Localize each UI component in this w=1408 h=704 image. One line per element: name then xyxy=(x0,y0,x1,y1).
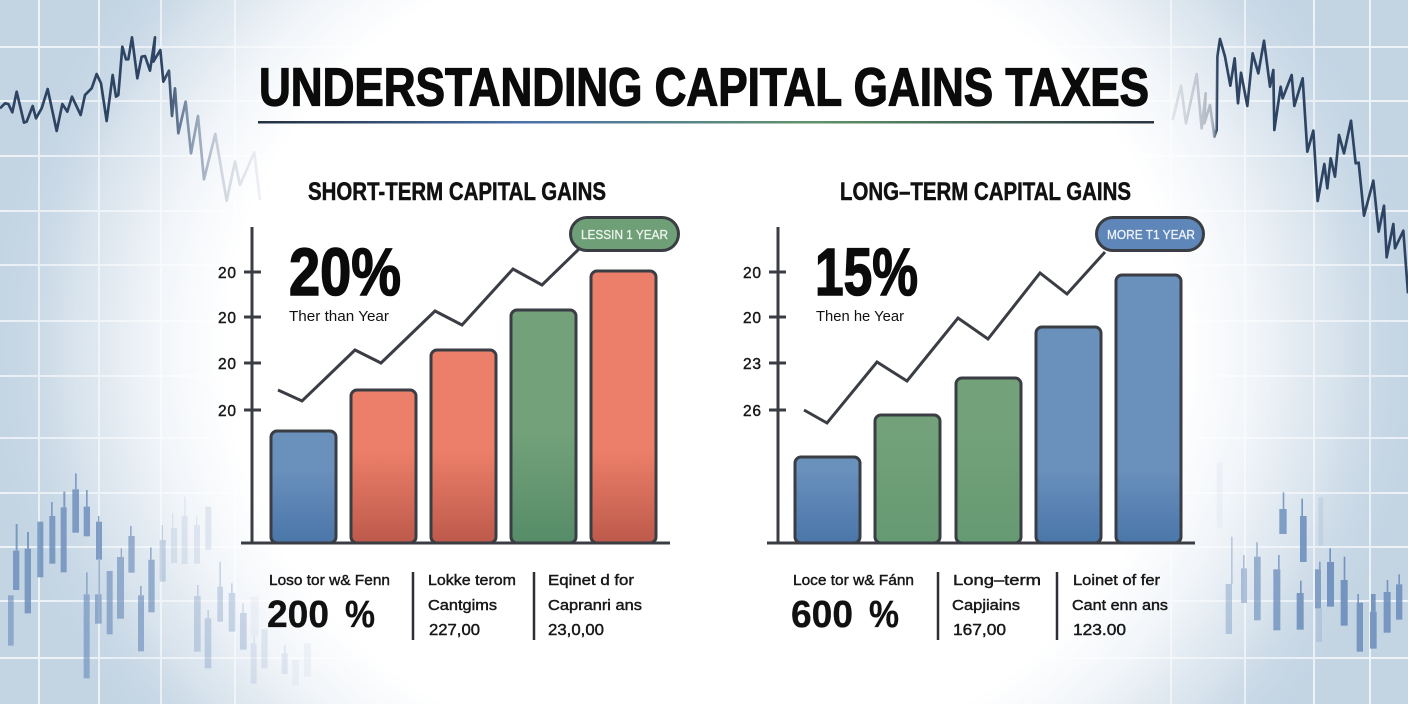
heading: short-term: SHORT-TERM CAPITAL GAINS xyxy=(308,178,606,206)
stat: rate: 600 xyxy=(791,594,853,636)
title: UNDERSTANDING CAPITAL GAINS TAXES xyxy=(259,58,1149,118)
stat: long-term amount xyxy=(413,572,516,640)
rate caption: Then he Year xyxy=(816,308,904,325)
stat: earned amount: 23,0,00 xyxy=(548,622,604,639)
heading: long-term: LONG–TERM CAPITAL GAINS xyxy=(840,178,1131,206)
badge: more than 1 year: MORE T1 YEAR xyxy=(1107,227,1195,242)
right candlestick chart xyxy=(1217,463,1402,652)
stat: long-term amount: Long–term xyxy=(953,572,1041,589)
rate: 15%: 15% xyxy=(815,235,918,310)
stat: long-term amount: 167,00 xyxy=(953,622,1006,639)
stat: long-term amount: 227,00 xyxy=(429,622,480,639)
badge: less than 1 year: LESSIN 1 YEAR xyxy=(581,227,668,242)
panel: long-term capital gains xyxy=(743,178,1204,640)
stat: long-term amount: Cantgims xyxy=(428,597,497,614)
rate caption: Ther than Year xyxy=(289,308,389,325)
stat: earned amount: Cant enn ans xyxy=(1072,597,1168,614)
stat: rate xyxy=(267,572,390,636)
bar chart: long-term xyxy=(767,227,1195,543)
panel: short-term capital gains xyxy=(218,178,678,640)
axis labels: short-term xyxy=(218,265,236,420)
stat: earned amount: Loinet of fer xyxy=(1073,572,1160,589)
stat: earned amount xyxy=(1057,572,1168,640)
right stock line chart xyxy=(1173,39,1408,293)
stat: long-term amount xyxy=(938,572,1041,640)
left candlestick chart xyxy=(8,473,311,685)
trend line: short-term xyxy=(278,248,580,401)
stat: rate: Loso tor w& Fenn xyxy=(269,572,390,589)
axis labels: short-term: 20 xyxy=(218,356,236,373)
stat: rate: % xyxy=(345,594,375,636)
stat: earned amount: Eqinet d for xyxy=(548,572,634,589)
stat: rate xyxy=(791,572,914,636)
left stock line chart xyxy=(0,37,260,201)
stat: rate: % xyxy=(869,594,899,636)
stat: earned amount: Capranri ans xyxy=(548,597,642,614)
axis labels: long-term: 20 xyxy=(743,310,761,327)
stat: earned amount: 123.00 xyxy=(1073,622,1126,639)
axis labels: long-term: 20 xyxy=(743,265,761,282)
axis labels: long-term: 23 xyxy=(743,356,761,373)
axis labels: short-term: 20 xyxy=(218,265,236,282)
stat: long-term amount: Lokke terom xyxy=(428,572,516,589)
trend line: long-term xyxy=(804,252,1105,423)
bar chart: short-term xyxy=(241,227,670,543)
axis labels: long-term: 26 xyxy=(743,403,761,420)
stat: rate: 200 xyxy=(267,594,329,636)
axis labels: short-term: 20 xyxy=(218,310,236,327)
title underline xyxy=(258,121,1154,124)
badge: more than 1 year xyxy=(1096,218,1204,250)
stat: rate: Loce tor w& Fánn xyxy=(793,572,914,589)
rate: 20%: 20% xyxy=(289,235,401,310)
badge: less than 1 year xyxy=(570,218,678,250)
axis labels: short-term: 20 xyxy=(218,403,236,420)
stat: long-term amount: Capjiains xyxy=(952,597,1020,614)
stat: earned amount xyxy=(534,572,642,640)
axis labels: long-term xyxy=(743,265,761,420)
